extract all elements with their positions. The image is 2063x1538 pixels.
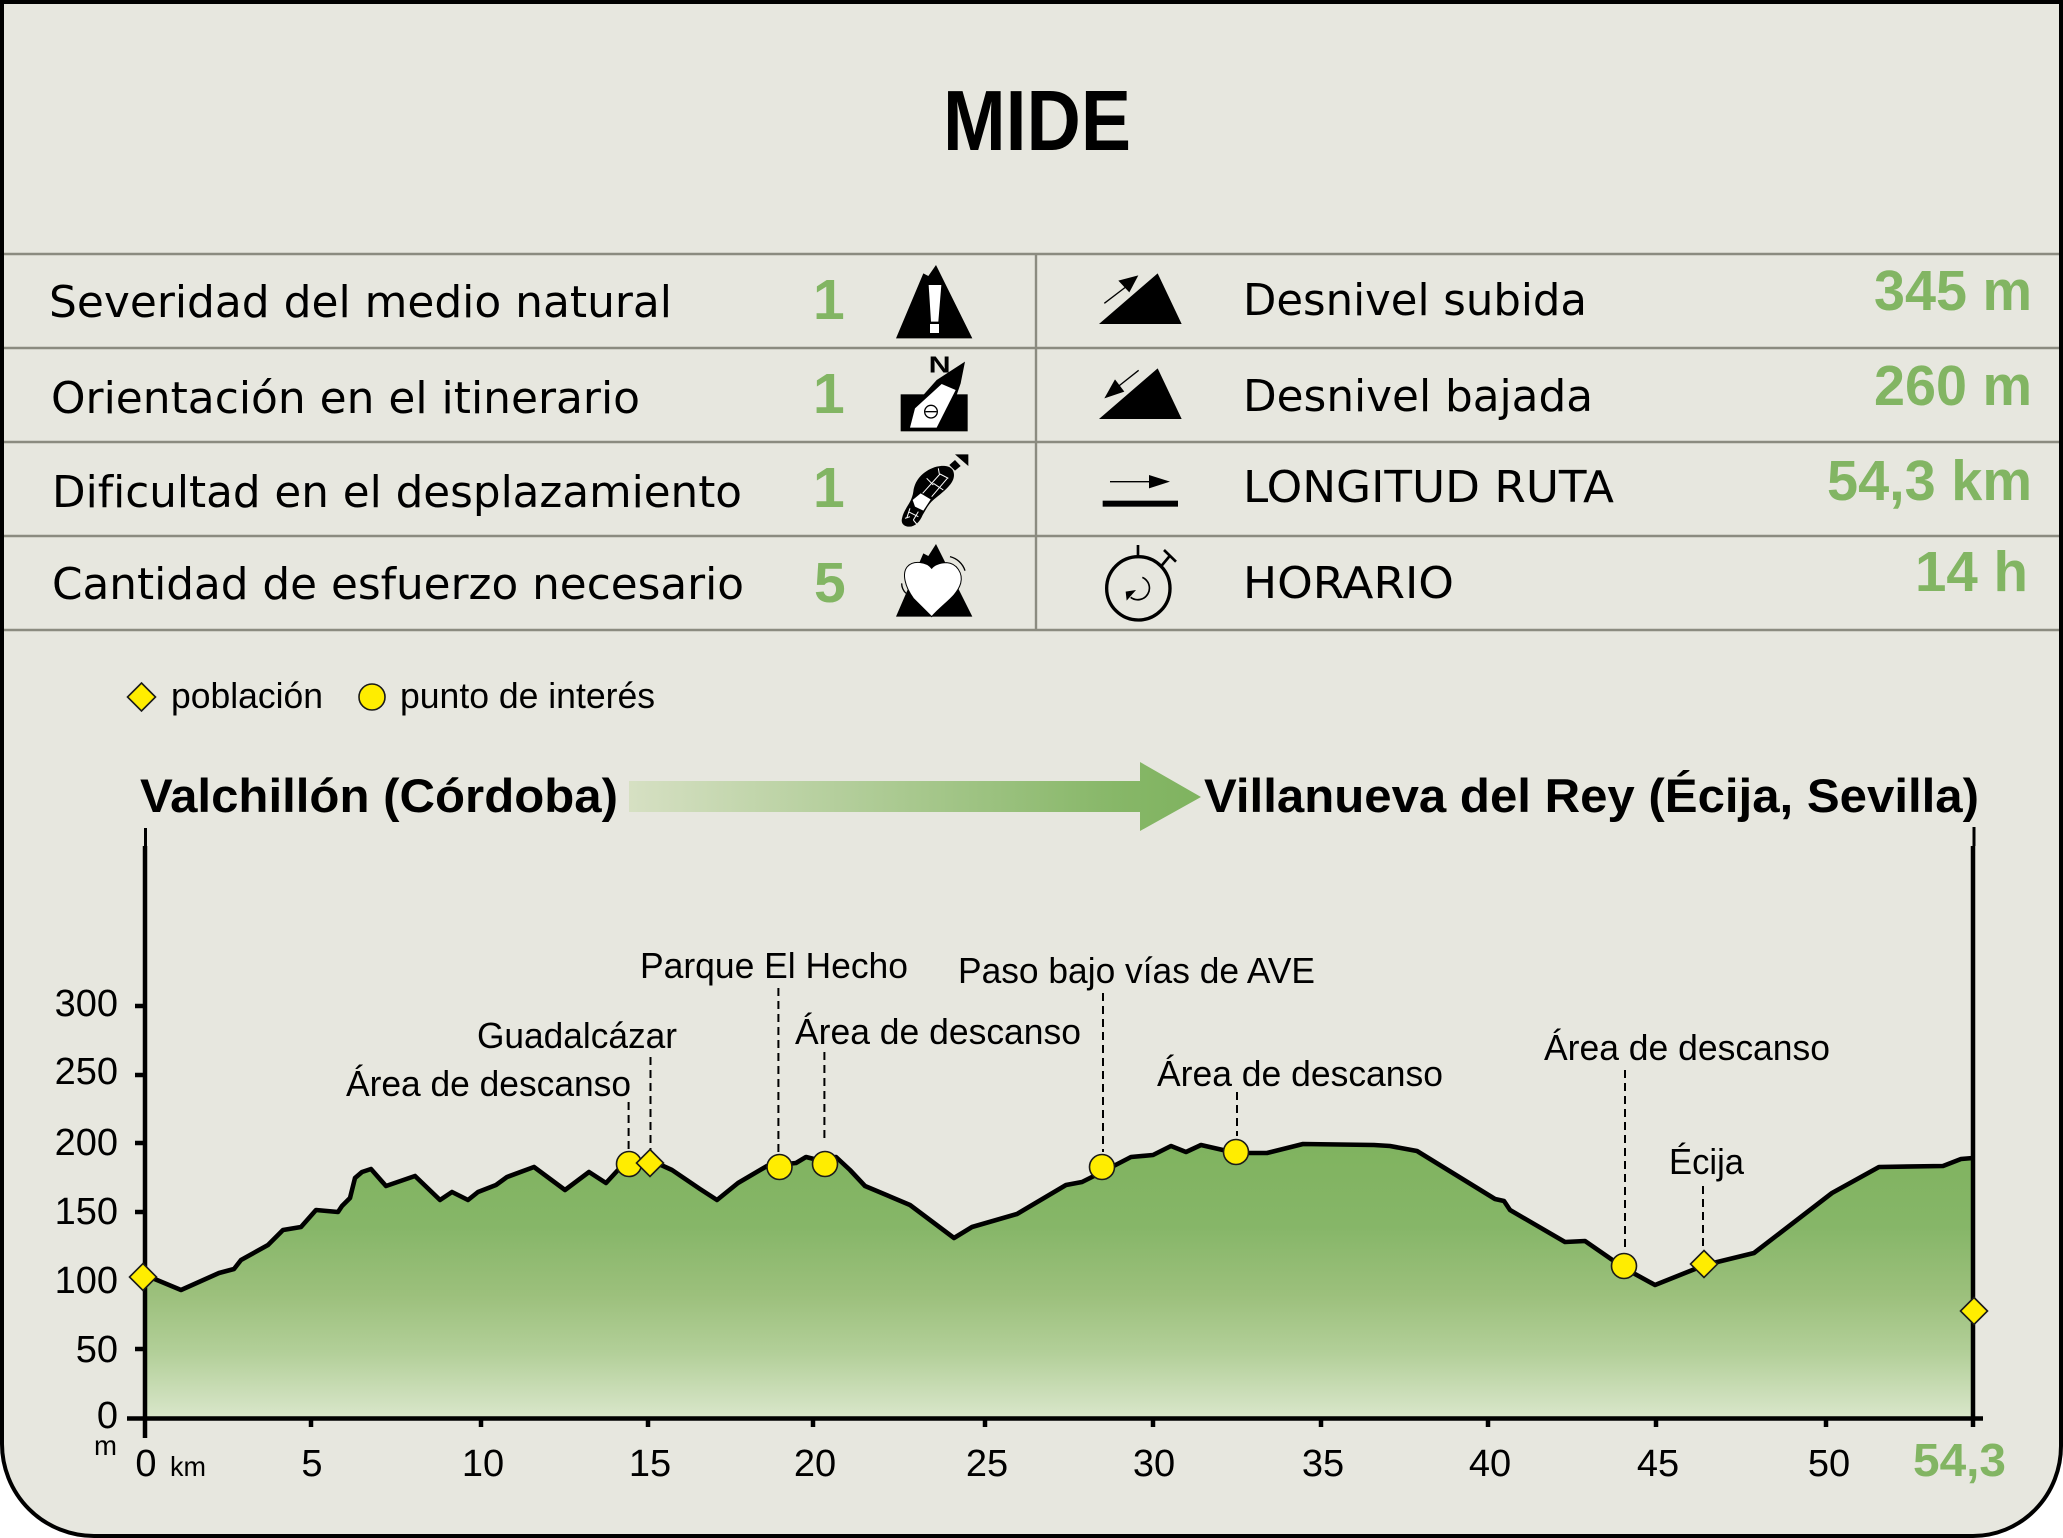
x axis labels [135, 1443, 1850, 1485]
icon: stopwatch [1107, 545, 1176, 620]
row label: severidad: Severidad del medio natural [49, 277, 672, 328]
value: desnivel bajada: 260 m [1874, 354, 2032, 418]
icon: ascent [1099, 273, 1182, 324]
markers: towns and points of interest [130, 1140, 1988, 1324]
x axis labels: 45 [1637, 1443, 1679, 1485]
score: dificultad: 1 [813, 456, 845, 520]
x axis labels: 40 [1469, 1443, 1511, 1485]
heading: origin: Valchillón (Córdoba) [140, 769, 618, 822]
row label: dificultad: Dificultad en el desplazamiento [52, 467, 742, 518]
place label: Área de descanso km 44: Área de descanso [1544, 1027, 1830, 1068]
label: longitud ruta: LONGITUD RUTA [1243, 462, 1614, 513]
x axis labels: 30 [1133, 1443, 1175, 1485]
icon: compass orientation: N [929, 351, 951, 377]
x axis labels: 0 [135, 1443, 157, 1485]
place label: Guadalcázar: Guadalcázar [477, 1015, 677, 1056]
label: desnivel subida: Desnivel subida [1243, 275, 1587, 326]
row label: cantidad de esfuerzo: Cantidad de esfuerzo necesario [52, 559, 744, 610]
icon: heart and mountain [896, 544, 972, 617]
value: desnivel subida: 345 m [1874, 259, 2032, 323]
unit: kilometres: km [170, 1451, 206, 1482]
icon: route length [1103, 475, 1178, 507]
x axis labels: 20 [794, 1443, 836, 1485]
legend: población [171, 675, 323, 716]
y axis labels: 100 [55, 1260, 118, 1302]
place label: Écija: Écija [1669, 1141, 1745, 1182]
value: longitud: 54,3 km [1827, 449, 2032, 513]
place label: Área de descanso km 14: Área de descanso [346, 1063, 631, 1104]
y axis labels: 0 [97, 1395, 118, 1437]
arrow: route direction [629, 762, 1201, 831]
x axis labels: 35 [1302, 1443, 1344, 1485]
y axis labels: 250 [55, 1051, 118, 1093]
total distance: 54,3 [1913, 1434, 2006, 1486]
label: horario: HORARIO [1243, 558, 1454, 609]
leader lines [629, 988, 1703, 1252]
icon: descent [1099, 368, 1182, 419]
y axis labels [55, 983, 118, 1437]
place label: Área de descanso km 32: Área de descanso [1157, 1053, 1443, 1094]
x axis labels: 10 [462, 1443, 504, 1485]
area: elevation profile [145, 1144, 1973, 1417]
y axis labels: 150 [55, 1191, 118, 1233]
icon: boot sole [902, 454, 968, 527]
x axis labels: 50 [1808, 1443, 1850, 1485]
value: horario: 14 h [1915, 540, 2028, 604]
score: orientación: 1 [813, 362, 845, 426]
legend [128, 675, 655, 716]
axis top ends [146, 827, 1974, 846]
title: MIDE [943, 74, 1131, 169]
y axis labels: 50 [76, 1329, 118, 1371]
x axis labels: 5 [301, 1443, 323, 1485]
heading: destination: Villanueva del Rey (Écija, Sevilla) [1204, 769, 1979, 822]
axes [127, 846, 1983, 1438]
place label: Área de descanso km 20: Área de descanso [795, 1011, 1081, 1052]
y axis labels: 300 [55, 983, 118, 1025]
row label: orientación: Orientación en el itinerario [51, 373, 640, 424]
unit: metres: m [94, 1430, 117, 1461]
place label: Paso bajo vías de AVE: Paso bajo vías de AVE [958, 950, 1315, 991]
place label: Parque El Hecho: Parque El Hecho [640, 945, 908, 986]
score: esfuerzo: 5 [814, 551, 846, 615]
icon: compass orientation [901, 351, 968, 431]
x axis labels: 15 [629, 1443, 671, 1485]
score: severidad: 1 [813, 268, 845, 332]
legend: punto de interés [400, 675, 655, 716]
elevation chart [55, 827, 2006, 1486]
icon: warning mountain [896, 265, 972, 338]
y axis labels: 200 [55, 1122, 118, 1164]
panel: MIDE table [4, 254, 2059, 630]
line: elevation profile [145, 1144, 1973, 1290]
label: desnivel bajada: Desnivel bajada [1243, 371, 1593, 422]
x axis labels: 25 [966, 1443, 1008, 1485]
